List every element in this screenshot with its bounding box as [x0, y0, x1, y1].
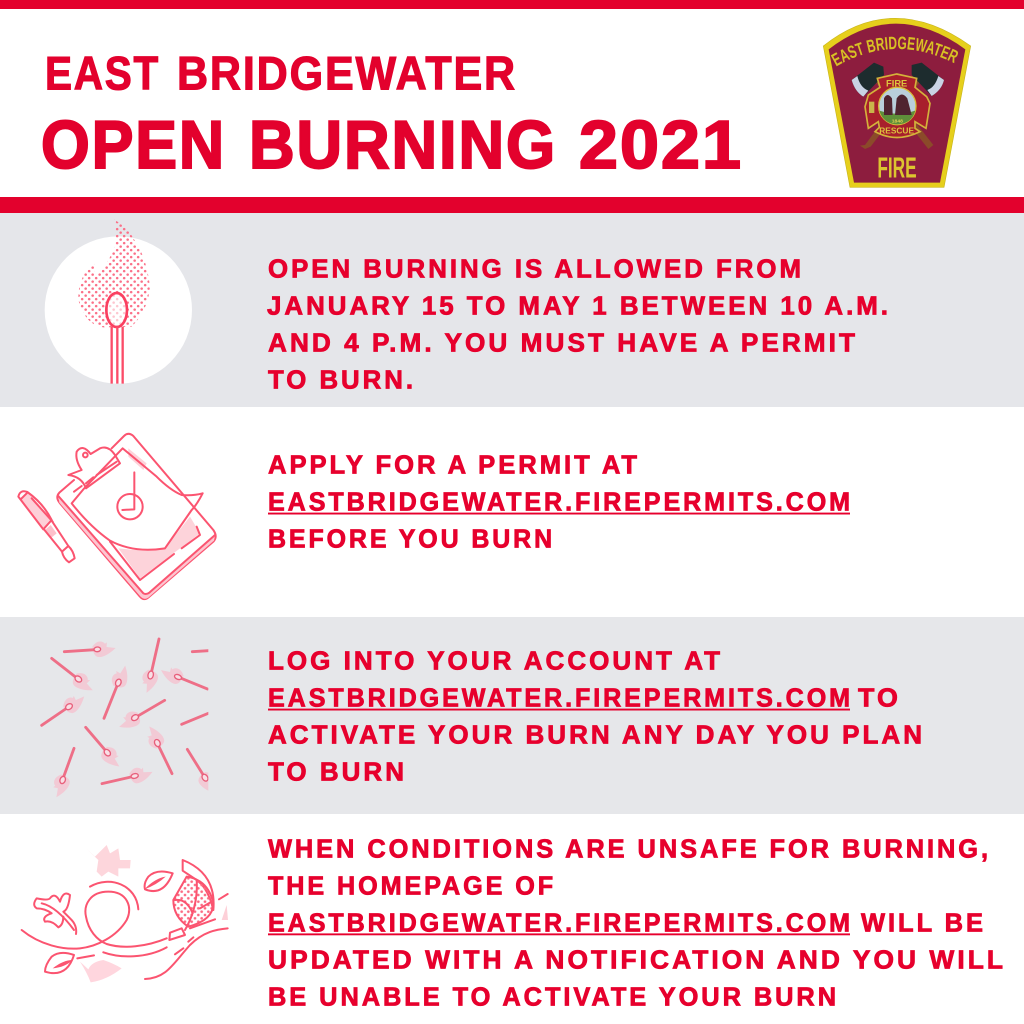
- large leaf cape: [183, 860, 214, 910]
- badge shield: [823, 18, 971, 187]
- match stick: [112, 327, 123, 384]
- title line: East Bridgewater: EAST: [45, 46, 160, 100]
- section 4 text: unsafe conditions: [268, 834, 1006, 1012]
- maltese cross: 1848: [892, 119, 903, 125]
- section 3 text: log in to activate: [268, 646, 925, 786]
- badge arc text: EAST BRIDGEWATER: [830, 36, 958, 66]
- maltese cross: [865, 74, 930, 137]
- title line: Open Burning 2021: 2021: [579, 107, 743, 183]
- section 1 text: dates and hours: [267, 254, 891, 394]
- icon: clipboard and pen: [18, 434, 216, 599]
- wind swirl lines: [22, 882, 228, 979]
- badge FIRE label: FIRE: [877, 152, 917, 184]
- title line: Open Burning 2021: BURNING: [249, 107, 557, 183]
- section 3 text: log in to activate: ACTIVATE YOUR BURN ANY DAY YOU PLAN: [268, 720, 925, 750]
- clipboard clip: [68, 447, 120, 488]
- oak leaf outline: [34, 893, 76, 934]
- section 4 text: unsafe conditions: WHEN CONDITIONS ARE UNSAFE FOR BURNING,: [268, 834, 991, 864]
- small leaf bottom left: [45, 953, 74, 973]
- pale leaf: [80, 960, 122, 982]
- header title: [41, 46, 743, 183]
- pen: [18, 491, 75, 562]
- section 2 text: apply for a permit: [268, 450, 853, 554]
- icon: wind and leaves: [22, 845, 228, 982]
- section 1 text: dates and hours: AND 4 P.M. YOU MUST HAVE A PERMIT: [268, 328, 858, 358]
- section 4 text: unsafe conditions: WILL BE: [861, 908, 986, 938]
- section 1 text: dates and hours: OPEN BURNING IS ALLOWED FROM: [268, 254, 804, 284]
- section 2 text: apply for a permit: BEFORE YOU BURN: [268, 524, 555, 554]
- section 2 text: apply for a permit: EASTBRIDGEWATER.FIREPERMITS.COM: [268, 486, 853, 516]
- match head: [106, 293, 127, 327]
- paper shadow: [118, 448, 200, 578]
- crossed axes: [852, 63, 944, 149]
- large dotted leaf: [173, 877, 213, 927]
- title line: East Bridgewater: BRIDGEWATER: [177, 46, 517, 100]
- fire department badge: [823, 18, 971, 188]
- paper sheet: [72, 448, 203, 550]
- title line: Open Burning 2021: OPEN: [41, 107, 226, 183]
- section 3 text: log in to activate: TO: [858, 682, 901, 712]
- icon: scattered matches: [42, 639, 221, 800]
- icon: burning match: [45, 219, 192, 384]
- section 1 text: dates and hours: TO BURN.: [268, 364, 416, 394]
- section 3 text: log in to activate: TO BURN: [268, 756, 407, 786]
- section 4 text: unsafe conditions: THE HOMEPAGE OF: [268, 870, 556, 900]
- flame halftone: [78, 219, 150, 327]
- section 3 text: log in to activate: EASTBRIDGEWATER.FIREPERMITS.COM: [268, 682, 853, 712]
- small leaf top: [145, 871, 173, 891]
- maltese cross: FIRE: [886, 79, 907, 89]
- section 4 text: unsafe conditions: BE UNABLE TO ACTIVATE YOUR BURN: [268, 982, 839, 1012]
- halftone oak leaf: [86, 845, 131, 877]
- section 4 text: unsafe conditions: UPDATED WITH A NOTIFICATION AND YOU WILL: [268, 944, 1006, 974]
- maltese cross: RESCUE: [879, 125, 914, 135]
- clock check mark: [117, 494, 143, 519]
- section 1 text: dates and hours: JANUARY 15 TO MAY 1 BETWEEN 10 A.M.: [267, 290, 891, 320]
- section 2 text: apply for a permit: APPLY FOR A PERMIT AT: [268, 450, 640, 480]
- section 4 text: unsafe conditions: EASTBRIDGEWATER.FIREPERMITS.COM: [268, 908, 853, 938]
- clipboard board: [57, 434, 216, 599]
- section 3 text: log in to activate: LOG INTO YOUR ACCOUNT AT: [268, 646, 723, 676]
